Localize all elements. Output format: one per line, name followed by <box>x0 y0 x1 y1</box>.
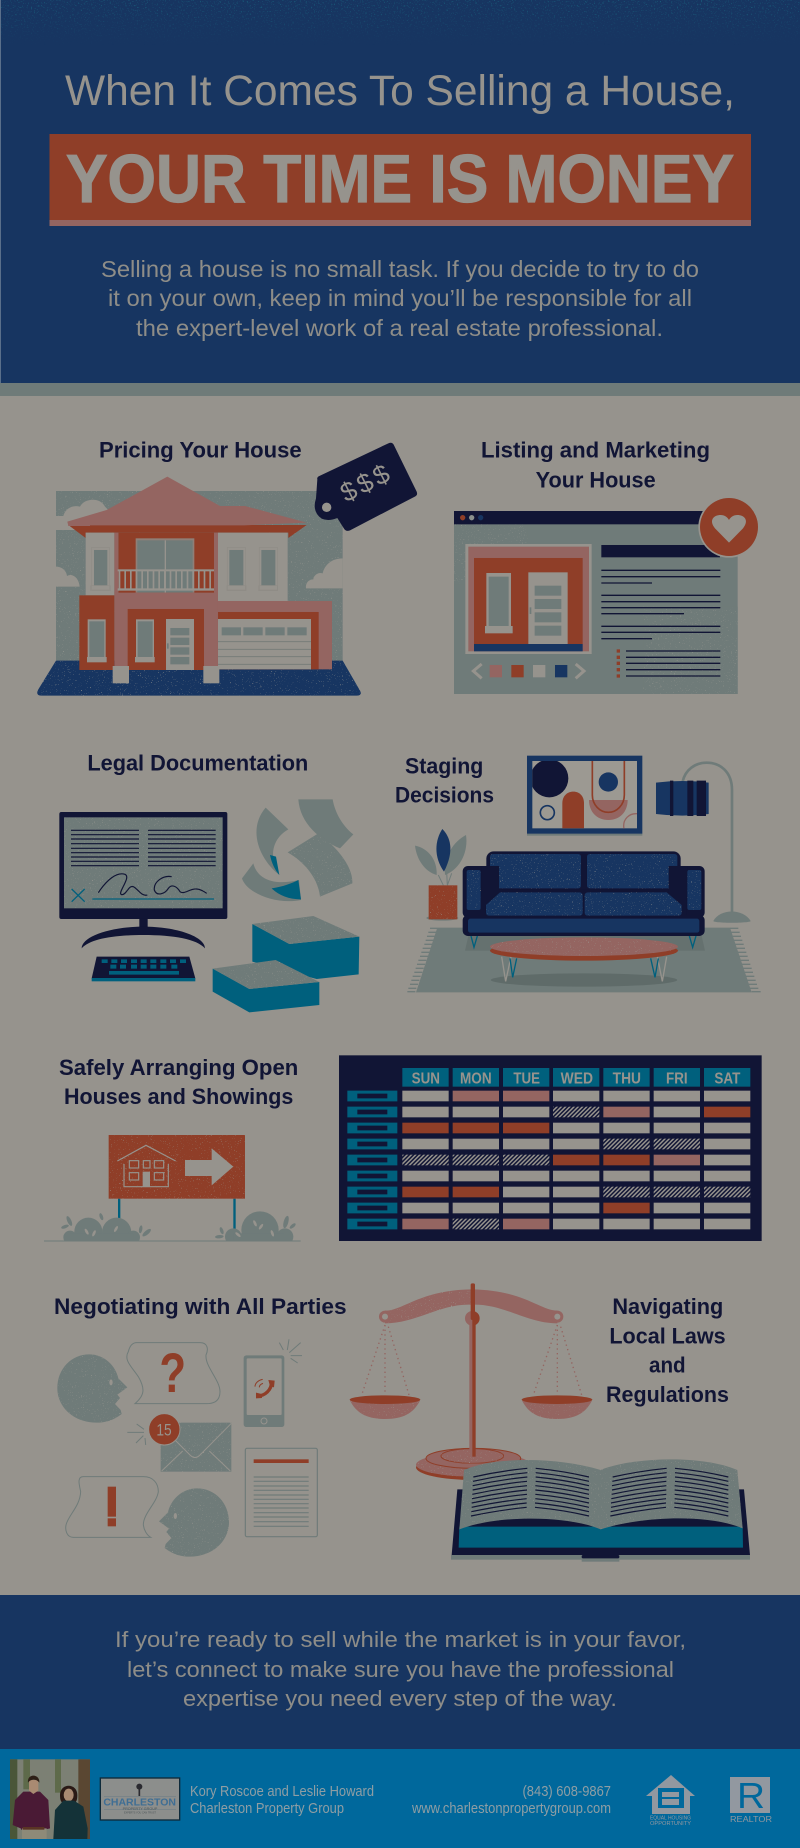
closing paragraph: let’s connect to make sure you have the professional <box>127 1657 674 1682</box>
illustration: flying papers <box>242 799 353 901</box>
heading: Listing and Marketing <box>481 438 710 463</box>
illustration: open book <box>451 1459 750 1562</box>
banner: your time is money: YOUR TIME IS MONEY <box>66 141 734 217</box>
heading: Houses and Showings <box>64 1084 293 1109</box>
heading: Your House <box>536 467 656 492</box>
illustration: person speaking, question <box>57 1341 220 1423</box>
intro paragraph: the expert-level work of a real estate professional. <box>136 315 663 341</box>
icon: price tag <box>315 443 417 531</box>
icon: equal housing opportunity: EQUAL HOUSING <box>650 1816 691 1822</box>
illustration: floor lamp <box>656 763 751 923</box>
icon: phone <box>244 1339 302 1427</box>
icon: realtor <box>730 1775 772 1824</box>
illustration: house <box>37 477 361 696</box>
illustration: computer monitor <box>59 812 227 948</box>
illustration: directional sign <box>109 1135 245 1230</box>
heading: Negotiating with All Parties <box>54 1294 347 1319</box>
panel: navigating local laws <box>350 1283 750 1562</box>
calendar day headers: SAT <box>714 1070 741 1087</box>
heading: Navigating <box>612 1294 723 1319</box>
illustration: scales of justice <box>350 1283 592 1480</box>
intro paragraph: Selling a house is no small task. If you decide to try to do <box>101 256 699 282</box>
calendar slots <box>402 1091 750 1229</box>
heading: Legal Documentation <box>87 751 308 776</box>
calendar day headers: TUE <box>513 1070 540 1087</box>
illustration: person speaking, exclamation <box>66 1477 229 1557</box>
panel: listing and marketing <box>454 438 760 694</box>
heading <box>395 753 494 808</box>
panel: header <box>0 0 800 396</box>
illustration: sofa <box>463 851 705 947</box>
thumbnails <box>473 664 584 678</box>
agent photo <box>10 1759 90 1839</box>
illustration: coffee table <box>490 937 678 981</box>
icon: equal housing opportunity: OPPORTUNITY <box>650 1821 691 1827</box>
contact details: (843) 608-9867 <box>522 1783 611 1800</box>
text lines <box>601 545 720 678</box>
icon: realtor: R <box>737 1775 765 1816</box>
icon: price tag: $$$ <box>335 457 398 508</box>
illustration: rug <box>407 928 761 992</box>
contact details: www.charlestonpropertygroup.com <box>411 1800 611 1817</box>
heading: Decisions <box>395 783 494 808</box>
panel: staging decisions <box>395 753 761 992</box>
illustration: browser window <box>454 511 738 694</box>
heading <box>606 1294 729 1407</box>
illustration: stacks of paper <box>213 916 359 1012</box>
icon: document <box>245 1448 317 1537</box>
listing photo <box>465 544 592 654</box>
heading: Pricing Your House <box>99 438 302 463</box>
calendar day headers: SUN <box>412 1070 440 1087</box>
heading <box>59 1055 298 1109</box>
illustration: keyboard <box>92 957 195 981</box>
icon: envelope with badge <box>127 1414 231 1472</box>
illustration: plant <box>415 829 466 921</box>
company logo <box>100 1778 180 1820</box>
calendar day headers: THU <box>613 1070 641 1087</box>
illustration: person speaking, question: ? <box>159 1341 186 1404</box>
heading <box>481 438 710 492</box>
calendar day headers <box>402 1068 750 1087</box>
calendar time labels <box>347 1091 397 1229</box>
illustration: wall art <box>527 756 648 838</box>
closing paragraph: expertise you need every step of the way. <box>183 1686 617 1711</box>
company logo: EXPERTS YOU CAN TRUST <box>124 1812 157 1815</box>
panel: negotiating with all parties <box>54 1294 347 1557</box>
balcony railing <box>118 569 214 591</box>
panel: pricing your house <box>37 438 417 696</box>
intro paragraph <box>101 256 699 341</box>
company logo: PROPERTY GROUP <box>123 1807 158 1811</box>
agent names: Kory Roscoe and Leslie Howard <box>190 1783 374 1800</box>
calendar day headers: FRI <box>666 1070 688 1087</box>
calendar day headers: MON <box>460 1070 492 1087</box>
calendar day headers: WED <box>561 1070 593 1087</box>
illustration: bushes <box>44 1211 301 1242</box>
intro paragraph: it on your own, keep in mind you’ll be responsible for all <box>108 285 692 311</box>
panel: footer <box>0 1749 800 1848</box>
icon: equal housing opportunity <box>646 1775 695 1827</box>
title line: When It Comes To Selling a House, <box>65 67 735 115</box>
panel: legal documentation <box>59 751 359 1012</box>
heading: and <box>649 1353 686 1378</box>
closing paragraph: If you’re ready to sell while the market is in your favor, <box>115 1627 686 1652</box>
icon: envelope with badge: 15 <box>156 1421 172 1440</box>
agent names <box>190 1783 374 1817</box>
panel: open houses and showings <box>44 1055 301 1249</box>
closing paragraph <box>115 1627 686 1711</box>
panel: call to action <box>0 1595 800 1749</box>
heading: Staging <box>405 753 483 778</box>
icon: heart badge <box>698 496 760 558</box>
heading: Safely Arranging Open <box>59 1055 298 1080</box>
heading: Regulations <box>606 1382 729 1407</box>
contact details <box>411 1783 611 1817</box>
panel: calendar <box>339 1055 762 1241</box>
icon: realtor: REALTOR <box>730 1814 772 1824</box>
agent names: Charleston Property Group <box>190 1800 344 1817</box>
heading: Local Laws <box>609 1323 726 1348</box>
company logo: CHARLESTON <box>103 1798 176 1809</box>
